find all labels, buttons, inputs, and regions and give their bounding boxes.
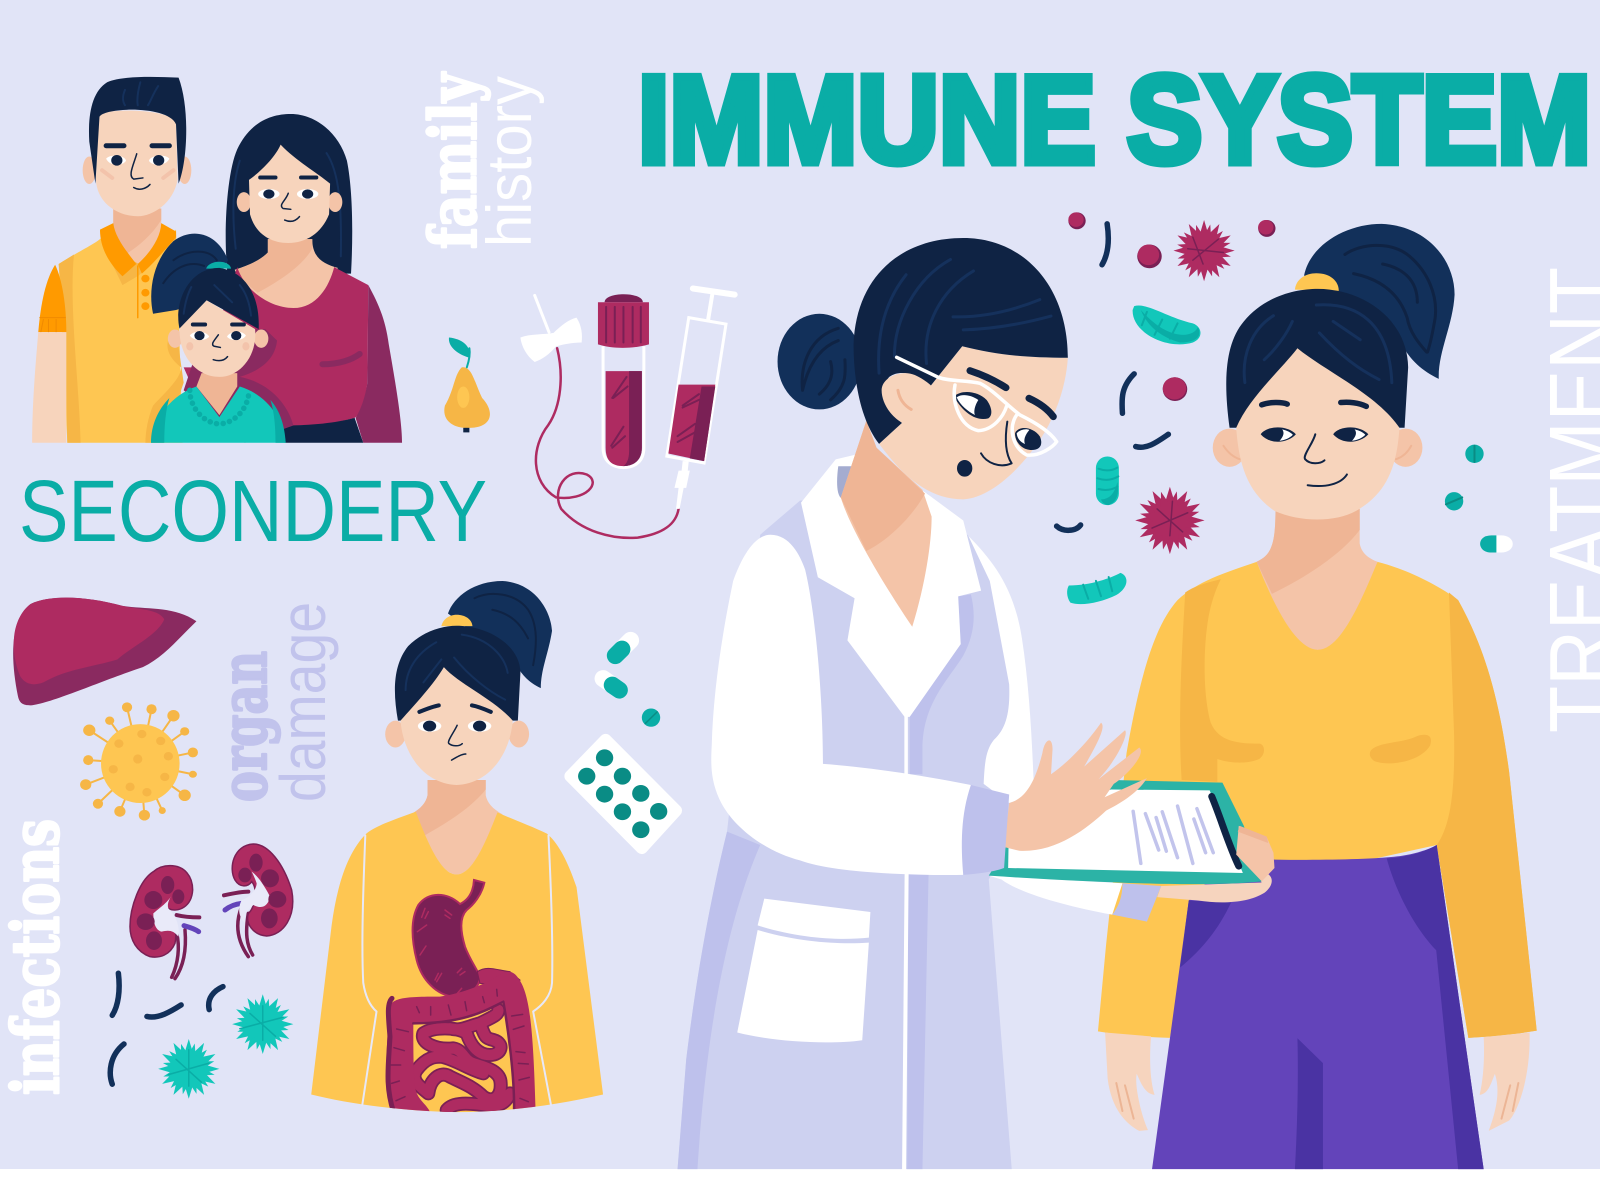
girl bbox=[145, 234, 286, 443]
icon: liver bbox=[13, 598, 196, 705]
label: organ damage: damage bbox=[267, 602, 339, 802]
label: organ damage bbox=[207, 602, 339, 802]
doctor figure bbox=[678, 455, 1274, 1169]
doctor upper arm and hand bbox=[711, 535, 1147, 875]
patient head bbox=[1213, 224, 1455, 650]
icon: test tube bbox=[598, 294, 649, 468]
label: infections: infections bbox=[0, 819, 74, 1095]
icon: pear bbox=[444, 337, 490, 432]
icon: white and teal capsule and tablets, right bbox=[1445, 445, 1513, 553]
patient blouse bbox=[1098, 562, 1537, 1038]
illustration: family bbox=[32, 77, 402, 443]
pills and blister pack bbox=[570, 640, 676, 848]
patient hands bbox=[1105, 1033, 1530, 1131]
digestive organs bbox=[387, 880, 536, 1113]
icon: kidneys bbox=[130, 844, 293, 979]
doctor face features bbox=[897, 357, 1057, 477]
patient figure bbox=[1098, 562, 1537, 1169]
doctor coat bbox=[678, 455, 1034, 1169]
sad patient with digestive organs bbox=[311, 581, 603, 1113]
icon: blood collection tube bbox=[520, 295, 679, 538]
man bbox=[32, 77, 191, 443]
clipboard bbox=[989, 778, 1274, 884]
heading: secondery: SECONDERY bbox=[19, 463, 487, 560]
doctor lower arm bbox=[989, 871, 1272, 922]
bacteria, lower left bbox=[110, 973, 295, 1100]
icon: syringe bbox=[667, 289, 735, 509]
label: family history bbox=[416, 71, 545, 249]
patient skirt bbox=[1152, 845, 1484, 1169]
germs: maroon and teal bacteria bbox=[1057, 212, 1275, 604]
woman bbox=[184, 114, 402, 443]
label: organ damage: organ bbox=[207, 651, 281, 802]
icon: virus bbox=[80, 702, 198, 821]
label: family history: family bbox=[416, 71, 492, 249]
doctor head bbox=[778, 238, 1068, 627]
label: family history: history bbox=[475, 76, 545, 247]
